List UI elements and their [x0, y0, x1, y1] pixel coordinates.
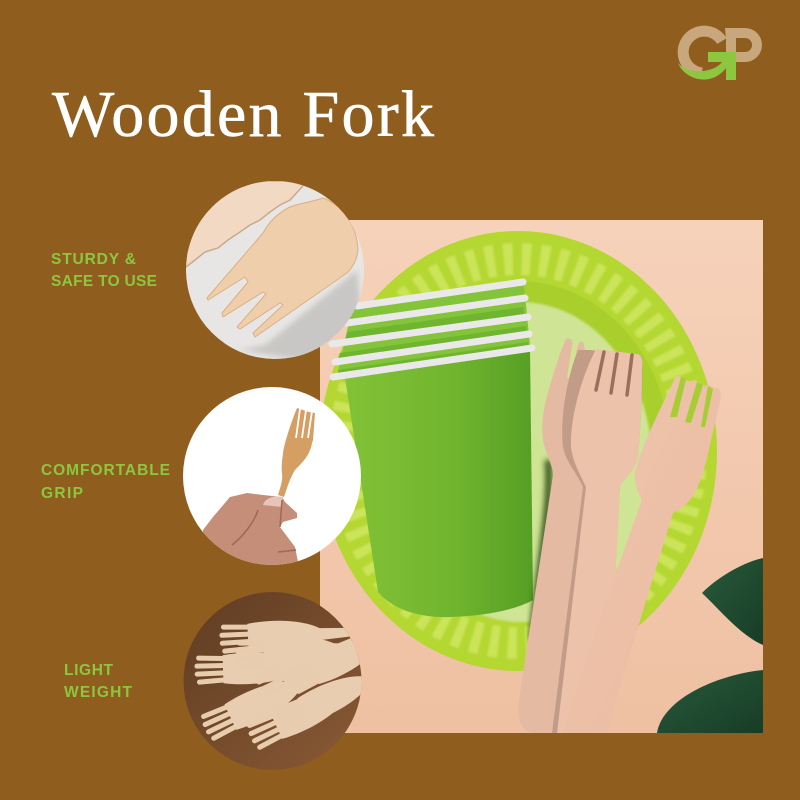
middle fork edge — [552, 350, 642, 733]
small fork — [278, 408, 315, 497]
stacked wooden forks — [518, 338, 642, 733]
label: sturdy and safe: STURDY & — [51, 251, 136, 268]
wooden spork — [207, 198, 358, 337]
spork shadow — [240, 270, 364, 360]
fork shadow — [532, 460, 549, 640]
label: light weight: WEIGHT — [64, 684, 133, 701]
leaf bottom — [657, 670, 763, 733]
label: sturdy and safe: SAFE TO USE — [51, 273, 157, 290]
circle photo: sturdy fork — [186, 181, 364, 360]
front fork of stack — [557, 349, 642, 733]
fork slots — [596, 352, 632, 395]
wooden knife — [186, 181, 305, 267]
hand — [200, 493, 298, 570]
fork slots — [296, 409, 312, 438]
back fork — [518, 338, 586, 733]
leaf top — [702, 558, 763, 645]
circle photo: hand holding fork — [183, 387, 361, 570]
photo background — [320, 220, 763, 733]
label: comfortable grip: GRIP — [41, 485, 83, 502]
thumb nail — [263, 496, 282, 507]
title: Wooden Fork — [52, 78, 434, 151]
fork group — [194, 620, 362, 750]
label: comfortable grip — [41, 462, 170, 502]
finger creases — [232, 500, 296, 552]
logo: GP — [678, 28, 762, 80]
label: sturdy and safe — [51, 251, 157, 290]
green paper cup — [332, 282, 533, 617]
circle photo: stacked forks on wood — [184, 592, 362, 770]
green paper plate — [319, 231, 717, 671]
front wooden fork — [612, 376, 720, 645]
label: light weight: LIGHT — [64, 662, 114, 679]
label: light weight — [64, 662, 133, 701]
panel: product photo — [319, 220, 763, 733]
label: comfortable grip: COMFORTABLE — [41, 462, 170, 479]
cup rims — [332, 282, 532, 377]
